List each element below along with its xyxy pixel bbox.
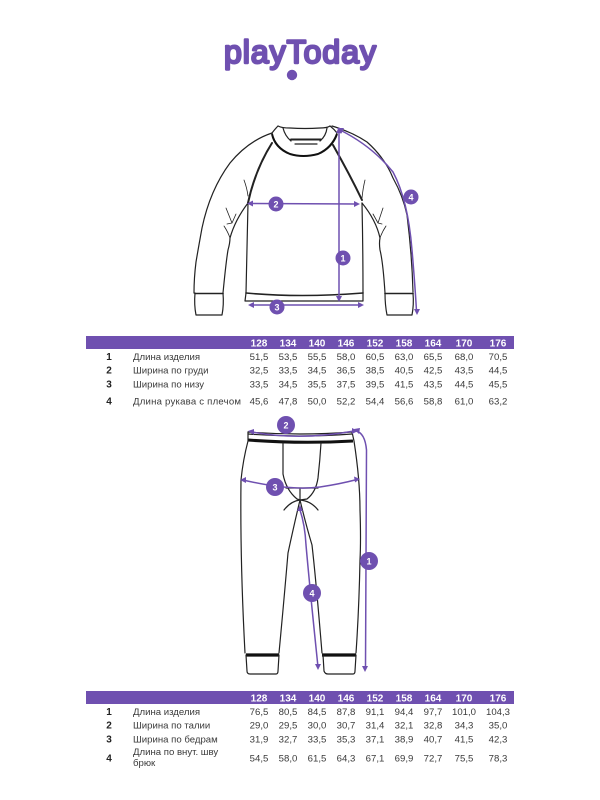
- row 2: 36,5: [337, 366, 355, 376]
- table header: 146: [338, 338, 355, 350]
- row 1: 51,5: [250, 352, 268, 363]
- row 1: 84,5: [308, 707, 326, 718]
- row 1: 55,5: [308, 352, 326, 363]
- row 2: 29,5: [279, 720, 297, 732]
- table header: 158: [396, 694, 413, 704]
- table header: 146: [338, 694, 355, 704]
- row 3: 41,5: [395, 380, 413, 390]
- row 1: 68,0: [455, 352, 473, 363]
- pants size table: [86, 691, 514, 769]
- row 1: 1: [106, 707, 112, 718]
- row 3: 40,7: [424, 734, 442, 746]
- table header: 170: [456, 694, 473, 704]
- row 3: 32,7: [279, 734, 297, 746]
- row 1: 104,3: [486, 707, 510, 718]
- row 4: 61,0: [455, 396, 473, 408]
- row 4: 54,4: [366, 396, 385, 408]
- logo: playToday: playToday: [224, 34, 376, 70]
- measurement 3 hem arrow: [248, 300, 364, 314]
- row 3: 37,1: [366, 734, 384, 746]
- row 1: [106, 707, 510, 718]
- row 3: Ширина по низу: [133, 380, 204, 390]
- measurement 1 length arrow: [336, 127, 350, 302]
- measurement 2 chest arrow: [247, 196, 360, 212]
- row 3: 3: [106, 734, 112, 746]
- row 1: [106, 352, 507, 363]
- row 1: 94,4: [395, 707, 414, 718]
- row 2: 2: [106, 366, 112, 376]
- pants line drawing: [241, 432, 360, 674]
- row 2: 35,0: [489, 720, 507, 732]
- row 2: 40,5: [395, 366, 413, 376]
- row 4: 69,9: [395, 754, 413, 764]
- measurement 3 hip arrow: [240, 476, 360, 496]
- row 3: 45,5: [489, 380, 507, 390]
- table header: 128: [251, 338, 268, 350]
- row 4: 67,1: [366, 754, 384, 764]
- measurement 4 sleeve arrow: [337, 128, 420, 315]
- sweater diagram with measurements: [194, 126, 420, 315]
- row 1: 1: [106, 352, 112, 363]
- row 4: 78,3: [489, 754, 507, 764]
- row 2: [106, 720, 507, 732]
- row 3: 43,5: [424, 380, 442, 390]
- row 4: Длина по внут. шву: [133, 747, 218, 758]
- row 2: [106, 366, 507, 376]
- row 2: 29,0: [250, 720, 268, 732]
- row 4: 56,6: [395, 396, 413, 408]
- row 4: [106, 747, 507, 769]
- row 3: 44,5: [455, 380, 473, 390]
- row 4: 64,3: [337, 754, 355, 764]
- row 1: 63,0: [395, 352, 413, 363]
- row 4: [106, 396, 507, 408]
- table header: 176: [490, 694, 507, 704]
- row 3: 31,9: [250, 734, 268, 746]
- pants diagram with measurements: [240, 416, 378, 674]
- row 1: 87,8: [337, 707, 355, 718]
- row 1: 80,5: [279, 707, 297, 718]
- row 4: 61,5: [308, 754, 326, 764]
- row 1: Длина изделия: [133, 352, 200, 363]
- measurement 3 hem arrow: 3: [274, 302, 280, 312]
- row 4: 47,8: [279, 396, 297, 408]
- row 2: 34,3: [455, 720, 473, 732]
- row 2: 33,5: [279, 366, 297, 376]
- row 3: 3: [106, 380, 112, 390]
- sweater size table: [86, 336, 514, 408]
- measurement 4 inseam arrow: 4: [309, 588, 315, 598]
- row 4: 75,5: [455, 754, 473, 764]
- table header: 158: [396, 338, 413, 350]
- table header: 140: [309, 694, 326, 704]
- row 3: Ширина по бедрам: [133, 734, 218, 746]
- row 2: 30,0: [308, 720, 326, 732]
- row 4: Длина рукава с плечом: [133, 396, 241, 408]
- table header: 134: [280, 338, 297, 350]
- measurement 3 hip arrow: 3: [272, 482, 278, 492]
- row 2: 30,7: [337, 720, 355, 732]
- measurement 1 length arrow: 1: [366, 556, 372, 566]
- row 1: 53,5: [279, 352, 297, 363]
- row 1: 70,5: [489, 352, 507, 363]
- measurement 2 chest arrow: 2: [273, 200, 279, 210]
- row 2: 38,5: [366, 366, 384, 376]
- row 1: 101,0: [452, 707, 476, 718]
- row 1: 76,5: [250, 707, 268, 718]
- table header: 152: [367, 338, 384, 350]
- row 3: 38,9: [395, 734, 413, 746]
- table header: 140: [309, 338, 326, 350]
- row 2: 43,5: [455, 366, 473, 376]
- row 4: 52,2: [337, 396, 355, 408]
- row 3: 37,5: [337, 380, 355, 390]
- measurement 1 length arrow: 1: [340, 254, 346, 264]
- row 2: 31,4: [366, 720, 385, 732]
- table header: 164: [425, 694, 442, 704]
- row 3: 33,5: [250, 380, 268, 390]
- table header: 176: [490, 338, 507, 350]
- measurement 4 sleeve arrow: 4: [408, 192, 414, 202]
- row 2: 44,5: [489, 366, 507, 376]
- row 1: 97,7: [424, 707, 442, 718]
- row 1: 91,1: [366, 707, 384, 718]
- row 2: 34,5: [308, 366, 326, 376]
- row 4: 54,5: [250, 754, 268, 764]
- row 4: 45,6: [250, 396, 268, 408]
- row 3: 33,5: [308, 734, 326, 746]
- row 4: 4: [106, 396, 112, 408]
- table header: 170: [456, 338, 473, 350]
- table header: 152: [367, 694, 384, 704]
- row 1: 60,5: [366, 352, 384, 363]
- row 2: 32,5: [250, 366, 268, 376]
- row 3: 35,3: [337, 734, 355, 746]
- row 1: 65,5: [424, 352, 442, 363]
- measurement 2 waist arrow: [248, 416, 358, 436]
- row 2: 32,8: [424, 720, 442, 732]
- row 3: [106, 734, 507, 746]
- measurement 2 waist arrow: 2: [283, 420, 289, 430]
- sweater line drawing: [194, 126, 413, 315]
- table header: 164: [425, 338, 442, 350]
- row 2: 32,1: [395, 720, 413, 732]
- row 2: 42,5: [424, 366, 442, 376]
- table header: [86, 336, 514, 350]
- row 3: 34,5: [279, 380, 297, 390]
- row 1: Длина изделия: [133, 707, 200, 718]
- row 2: 2: [106, 720, 112, 732]
- row 4: 58,8: [424, 396, 442, 408]
- row 3: 42,3: [489, 734, 507, 746]
- measurement 4 inseam arrow: [297, 505, 321, 670]
- measurement 1 length arrow: [354, 428, 378, 672]
- row 3: 35,5: [308, 380, 326, 390]
- row 4: 72,7: [424, 754, 442, 764]
- row 2: Ширина по груди: [133, 366, 209, 376]
- table header: 128: [251, 694, 268, 704]
- row 3: [106, 380, 507, 390]
- row 4: 50,0: [308, 396, 326, 408]
- row 4: 63,2: [489, 396, 507, 408]
- row 1: 58,0: [337, 352, 355, 363]
- table header: 134: [280, 694, 297, 704]
- row 4: 58,0: [279, 754, 297, 764]
- row 4: 4: [106, 754, 112, 764]
- row 3: 41,5: [455, 734, 473, 746]
- row 4: брюк: [133, 758, 156, 769]
- row 2: Ширина по талии: [133, 720, 210, 732]
- row 3: 39,5: [366, 380, 384, 390]
- table header: [86, 691, 514, 704]
